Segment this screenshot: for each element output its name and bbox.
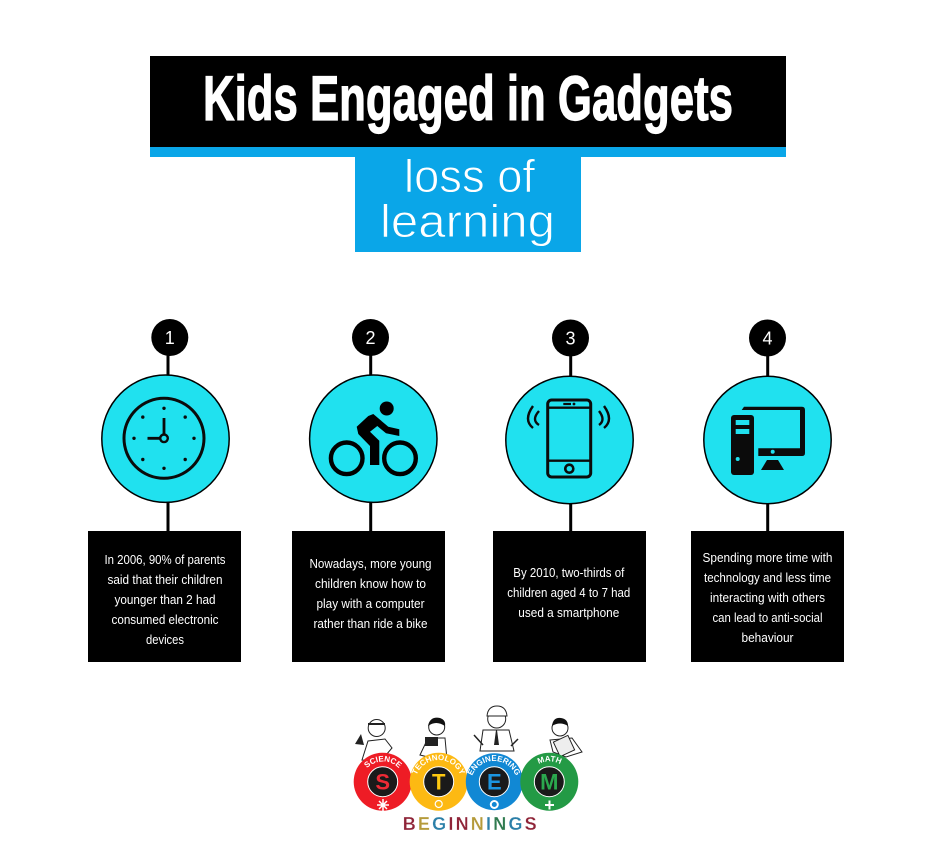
text box 4: Spending more time with xyxy=(702,551,833,565)
text box 4: interacting with others xyxy=(710,591,825,605)
technology kid xyxy=(420,718,447,760)
text box 1: younger than 2 had xyxy=(114,593,216,607)
number badge 4 xyxy=(749,320,786,356)
math kid xyxy=(550,718,582,757)
number badge 2 xyxy=(352,319,389,356)
text box 1: said that their children xyxy=(108,573,223,587)
panel: step 1 xyxy=(88,319,241,662)
badge: science: S xyxy=(375,770,390,794)
icon: desktop computer xyxy=(704,376,831,504)
number badge 3: 3 xyxy=(565,328,576,348)
badge: engineering xyxy=(466,753,522,810)
badge: technology: TECHNOLOGY xyxy=(412,754,466,774)
number badge 4: 4 xyxy=(762,328,773,348)
number badge 1 xyxy=(151,319,188,356)
subtitle box: learning xyxy=(380,195,555,247)
text box 3 xyxy=(493,531,646,662)
badge: math: M xyxy=(540,770,558,794)
icon: clock xyxy=(102,375,229,502)
icon: smartphone xyxy=(506,376,633,504)
text box 4: can lead to anti-social xyxy=(712,611,822,625)
text box 4 xyxy=(691,531,844,662)
text box 2: play with a computer xyxy=(316,597,424,611)
subtitle box xyxy=(355,150,581,252)
subtitle box: loss of xyxy=(404,150,535,202)
number badge 3 xyxy=(552,320,589,356)
text box 2: rather than ride a bike xyxy=(314,617,428,631)
icon: cyclist xyxy=(310,375,437,502)
logo: STEM Beginnings xyxy=(354,706,583,834)
text box 1: In 2006, 90% of parents xyxy=(104,553,226,567)
badge: math: MATH xyxy=(537,756,562,764)
text box 1 xyxy=(88,531,241,662)
panel: step 4 xyxy=(691,320,844,662)
badge: science: SCIENCE xyxy=(364,756,402,768)
text box 1: devices xyxy=(146,633,184,647)
badge: technology: T xyxy=(432,770,446,794)
engineer kid xyxy=(474,706,518,751)
number badge 1: 1 xyxy=(165,328,175,348)
title banner xyxy=(150,56,786,157)
text box 3: children aged 4 to 7 had xyxy=(507,586,630,600)
text box 4: behaviour xyxy=(742,631,794,645)
text box 3: used a smartphone xyxy=(518,606,619,620)
panel: step 3 xyxy=(493,320,646,662)
wordmark: BEGINNINGS xyxy=(403,814,537,834)
badge: engineering: ENGINEERING xyxy=(467,755,520,776)
number badge 2: 2 xyxy=(365,328,376,348)
text box 2: children know how to xyxy=(315,577,426,591)
text box 2 xyxy=(292,531,445,662)
scientist kid xyxy=(355,720,392,762)
badge: science xyxy=(354,752,411,811)
panel: step 2 xyxy=(292,319,445,662)
text box 4: technology and less time xyxy=(704,571,831,585)
text box 2: Nowadays, more young xyxy=(310,557,432,571)
text box 1: consumed electronic xyxy=(112,613,218,627)
badge: math xyxy=(520,752,578,811)
badge: technology xyxy=(410,752,467,811)
text box 3: By 2010, two-thirds of xyxy=(513,566,625,580)
badge: engineering: E xyxy=(487,770,502,794)
